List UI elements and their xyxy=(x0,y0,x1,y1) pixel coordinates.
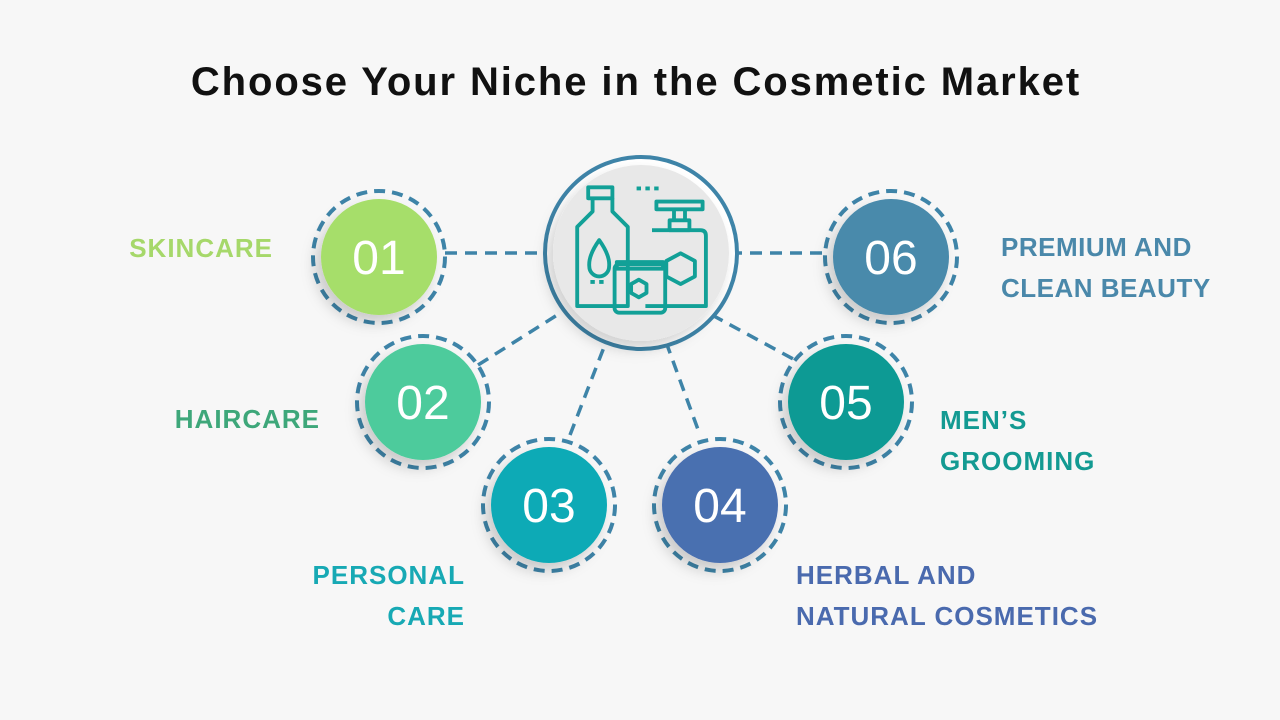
circle 06: 06 xyxy=(864,232,918,285)
circle 02: 02 xyxy=(396,377,450,430)
label: herbal: HERBAL AND xyxy=(796,560,976,590)
circle 03: 03 xyxy=(522,480,576,533)
connectors xyxy=(445,253,825,435)
center icon circle xyxy=(545,157,737,349)
circle 01 xyxy=(313,191,445,323)
circle 05 xyxy=(780,336,912,468)
circle 05: 05 xyxy=(819,377,873,430)
label: men's grooming: GROOMING xyxy=(940,446,1095,476)
label: personal care: CARE xyxy=(387,601,465,631)
circle 01: 01 xyxy=(352,232,406,285)
circle 04 xyxy=(654,439,786,571)
circle 02 xyxy=(357,336,489,468)
label: personal care: PERSONAL xyxy=(313,560,465,590)
label: skincare: SKINCARE xyxy=(129,233,273,263)
title: Choose Your Niche in the Cosmetic Market xyxy=(191,60,1081,104)
label: premium: CLEAN BEAUTY xyxy=(1001,273,1211,303)
label: haircare: HAIRCARE xyxy=(175,404,320,434)
circle 03 xyxy=(483,439,615,571)
label: premium: PREMIUM AND xyxy=(1001,232,1192,262)
circle 04: 04 xyxy=(693,480,747,533)
icon: cosmetic bottles xyxy=(577,187,706,313)
label: herbal: NATURAL COSMETICS xyxy=(796,601,1098,631)
label: men's grooming: MEN’S xyxy=(940,405,1027,435)
circle 06 xyxy=(825,191,957,323)
